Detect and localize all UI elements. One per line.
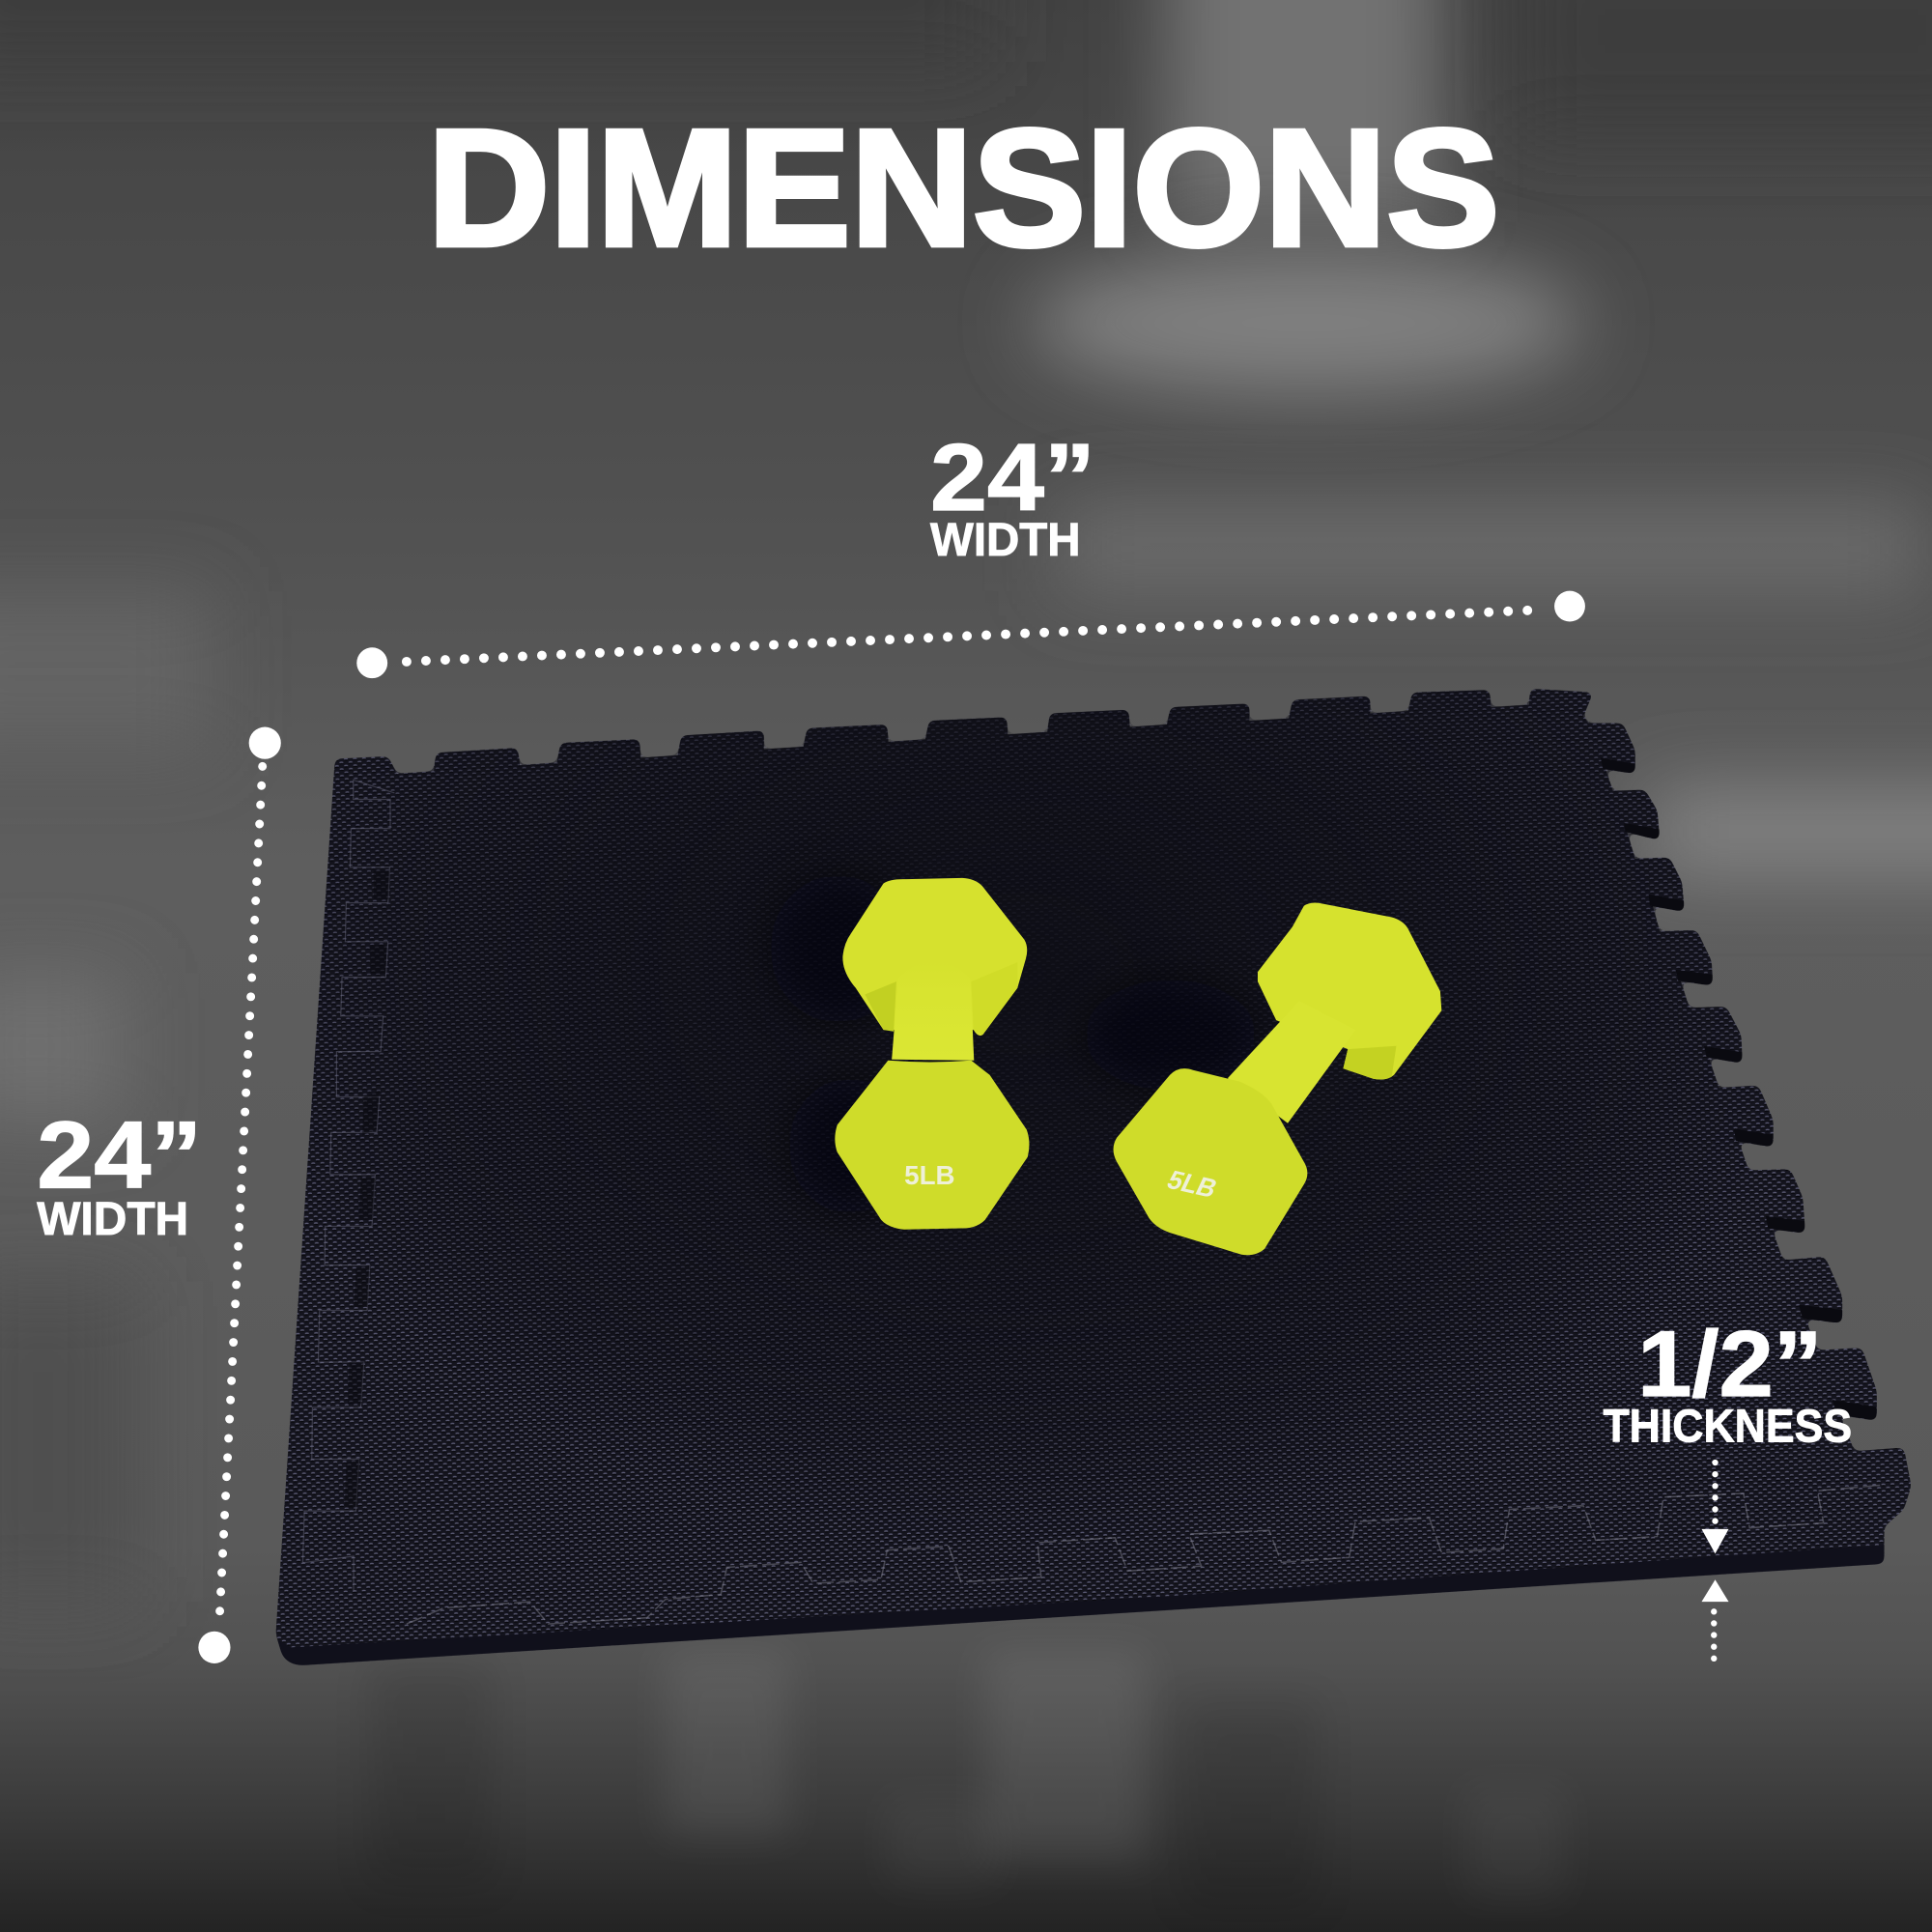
left interlock seam [302,780,394,1592]
left width value: 24” [37,1102,202,1208]
arrow: down to mat top [1701,1463,1729,1553]
dumbbell cast shadows [770,875,1257,1213]
left dumbbell bottom head [835,1061,1029,1230]
measurement: thickness [1603,1311,1852,1667]
title: DIMENSIONS [428,96,1499,281]
top width value: 24” [930,424,1095,530]
left weight mark: 5LB [904,1160,955,1190]
top width label: WIDTH [930,514,1081,566]
mat base [306,690,1773,1532]
left dotted line [198,727,281,1663]
right dumbbell [1114,903,1441,1255]
dark bands along left seam [345,870,389,1508]
mat surface texture [246,666,1932,1688]
dumbbells [835,878,1441,1255]
right dumbbell bottom head [1114,1068,1307,1255]
tab side faces [1601,757,1877,1421]
top dotted line [356,591,1585,678]
right weight mark: 5LB [1163,1164,1222,1204]
arrow: up to mat bottom [1701,1579,1729,1667]
left dumbbell handle [892,960,974,1061]
left dumbbell top head [842,878,1027,1036]
thickness label: THICKNESS [1603,1400,1852,1452]
measurement: top width [356,424,1585,678]
left dumbbell [835,878,1029,1230]
right dumbbell handle [1228,1001,1355,1123]
mat front edge [276,1545,1884,1669]
foam mat [246,666,1932,1688]
bottom interlock seam [407,1485,1886,1624]
right dumbbell top head [1258,903,1441,1080]
thickness value: 1/2” [1637,1311,1822,1416]
left width label: WIDTH [37,1193,188,1245]
measurement: left width [37,727,281,1663]
